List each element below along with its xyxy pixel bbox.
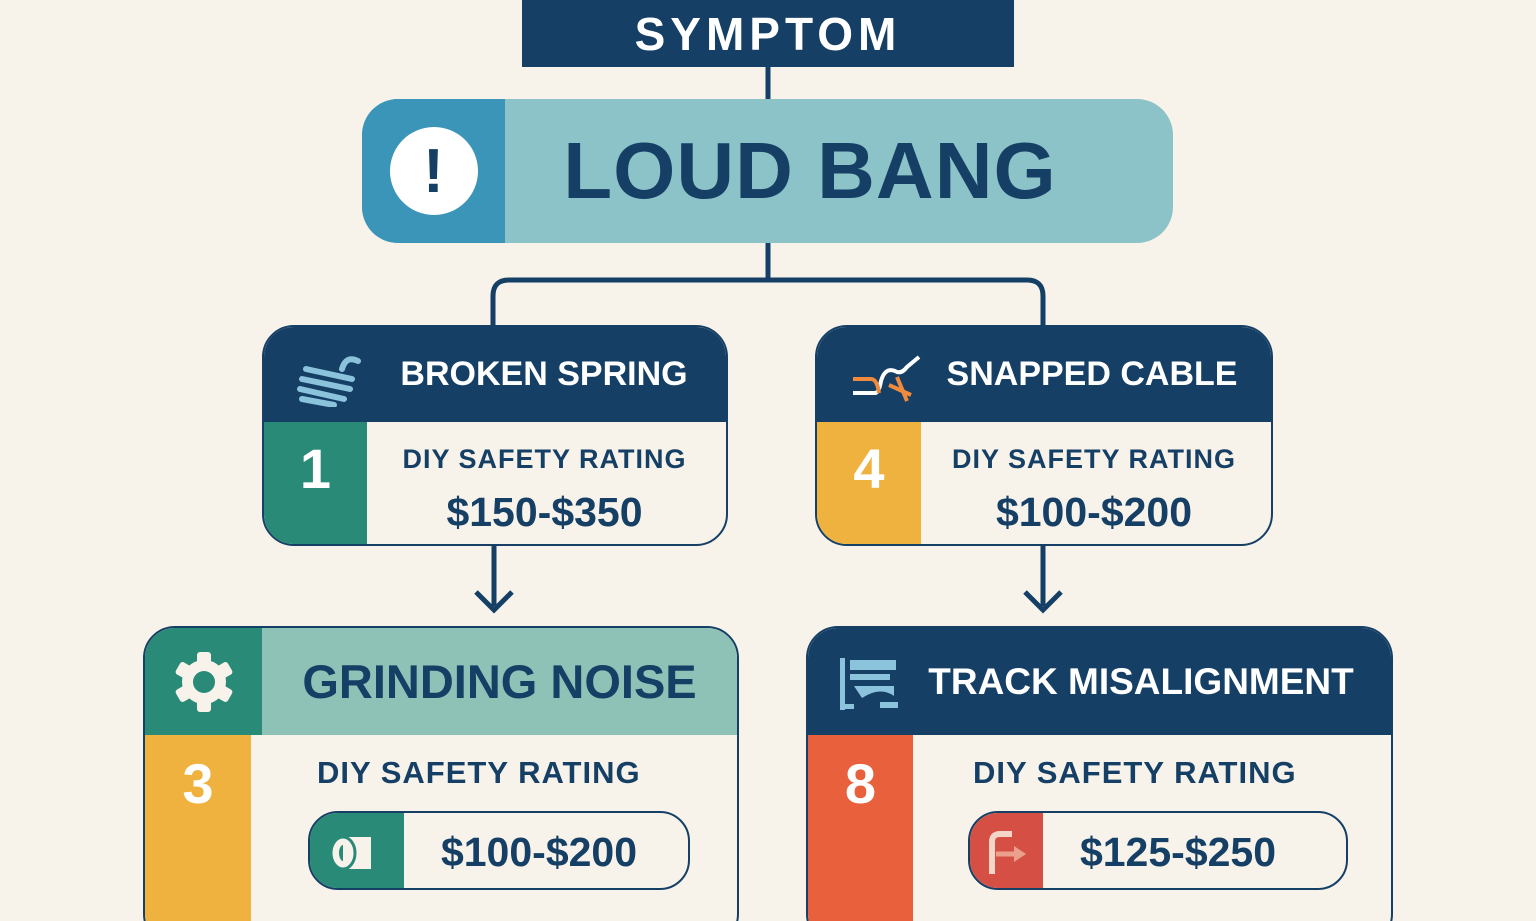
number xyxy=(808,735,913,921)
panel: broken spring xyxy=(262,325,728,546)
number xyxy=(145,735,251,921)
title: symptom xyxy=(522,0,1014,67)
rating: DIY SAFETY RATING xyxy=(402,444,687,474)
panel: snapped cable xyxy=(815,325,1273,546)
heading: loud bang: LOUD BANG xyxy=(563,126,1057,215)
cost pill xyxy=(968,811,1348,890)
icon: gear xyxy=(145,628,262,735)
rating: DIY SAFETY RATING xyxy=(952,444,1236,474)
cost pill: $100-$200 xyxy=(441,829,637,875)
number xyxy=(264,422,367,548)
icon: track xyxy=(840,658,898,710)
rating: DIY SAFETY RATING xyxy=(317,755,641,790)
icon: alert: ! xyxy=(423,136,444,206)
cost: $150-$350 xyxy=(446,488,643,534)
icon: cable xyxy=(853,356,920,402)
cost pill xyxy=(308,811,690,890)
panel: track misalignment xyxy=(806,626,1393,921)
panel: grinding noise xyxy=(143,626,739,921)
symptom box: loud bang xyxy=(362,99,1173,243)
panel: grinding noise: GRINDING NOISE xyxy=(302,655,697,708)
header xyxy=(264,327,730,422)
panel: track misalignment: TRACK MISALIGNMENT xyxy=(928,660,1354,702)
cost pill: $125-$250 xyxy=(1080,829,1276,875)
title: symptom: SYMPTOM xyxy=(635,8,901,60)
header: BROKEN SPRING xyxy=(400,355,688,393)
number xyxy=(817,422,921,548)
rating: DIY SAFETY RATING xyxy=(973,755,1297,790)
icon: alert xyxy=(362,99,505,243)
number: 1 xyxy=(300,437,331,500)
icon: spring xyxy=(297,356,361,407)
number: 3 xyxy=(182,752,214,815)
panel: snapped cable: SNAPPED CABLE xyxy=(947,355,1237,393)
number: 8 xyxy=(845,752,876,815)
cost: $100-$200 xyxy=(996,488,1192,534)
number: 4 xyxy=(853,437,885,500)
